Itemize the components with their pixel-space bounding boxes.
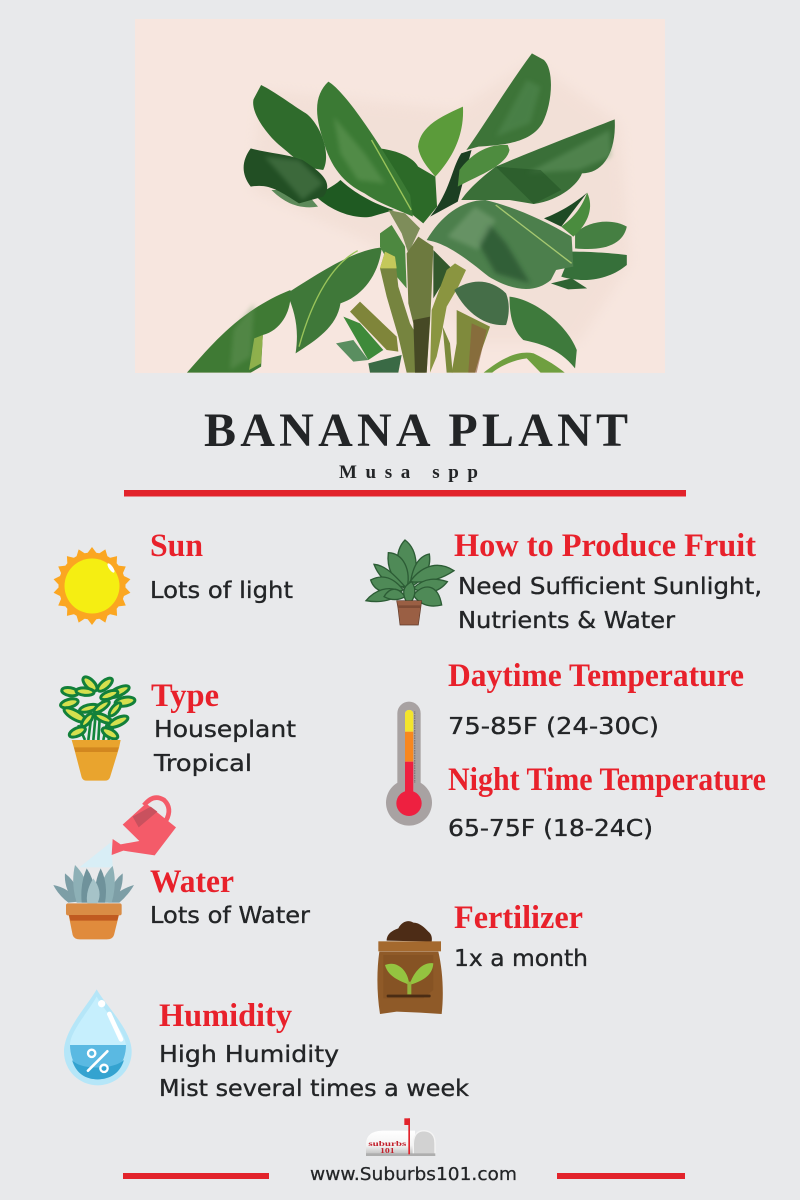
heading: humidity: Humidity <box>159 998 292 1034</box>
heading: type: Type <box>151 678 219 714</box>
icon: sun <box>53 547 131 625</box>
logo: mailbox: suburbs <box>368 1139 407 1148</box>
text: water: Lots of Water <box>150 903 311 929</box>
text: humidity: Mist several times a week <box>159 1076 470 1102</box>
icon: thermometer <box>386 702 432 826</box>
heading: sun: Sun <box>150 528 203 564</box>
photo: banana plant on peach background <box>135 19 665 373</box>
text: type <box>153 717 296 777</box>
icon: fruit plant in brown pot <box>366 540 454 625</box>
title divider <box>124 490 686 496</box>
text: night temperature: 65-75F (18-24C) <box>448 816 653 842</box>
text: fruit: Nutrients & Water <box>458 608 676 634</box>
text: humidity <box>159 1042 470 1102</box>
text: type: Houseplant <box>154 717 296 743</box>
text: sun: Lots of light <box>150 578 293 604</box>
subtitle: Musa spp <box>339 462 478 483</box>
heading: daytime temperature: Daytime Temperature <box>448 658 744 694</box>
text: humidity: High Humidity <box>159 1042 339 1068</box>
icon: watering can and succulent <box>53 798 176 939</box>
title: BANANA PLANT <box>204 404 628 457</box>
icon: houseplant with yellow pot <box>60 675 136 781</box>
text: fruit <box>458 574 762 634</box>
heading: fertilizer: Fertilizer <box>454 900 583 936</box>
heading: fruit: How to Produce Fruit <box>454 528 756 564</box>
text: fertilizer: 1x a month <box>454 946 588 972</box>
text: fruit: Need Sufficient Sunlight, <box>458 574 762 600</box>
logo: mailbox <box>366 1118 435 1156</box>
heading: night temperature: Night Time Temperature <box>448 762 766 798</box>
text: daytime temperature: 75-85F (24-30C) <box>448 714 659 740</box>
icon: water drop humidity <box>64 989 132 1085</box>
text: type: Tropical <box>153 751 252 777</box>
footer website: www.Suburbs101.com <box>310 1164 517 1185</box>
logo: mailbox: 101 <box>380 1146 395 1155</box>
heading: water: Water <box>150 864 234 900</box>
icon: fertilizer bag <box>377 921 443 1014</box>
